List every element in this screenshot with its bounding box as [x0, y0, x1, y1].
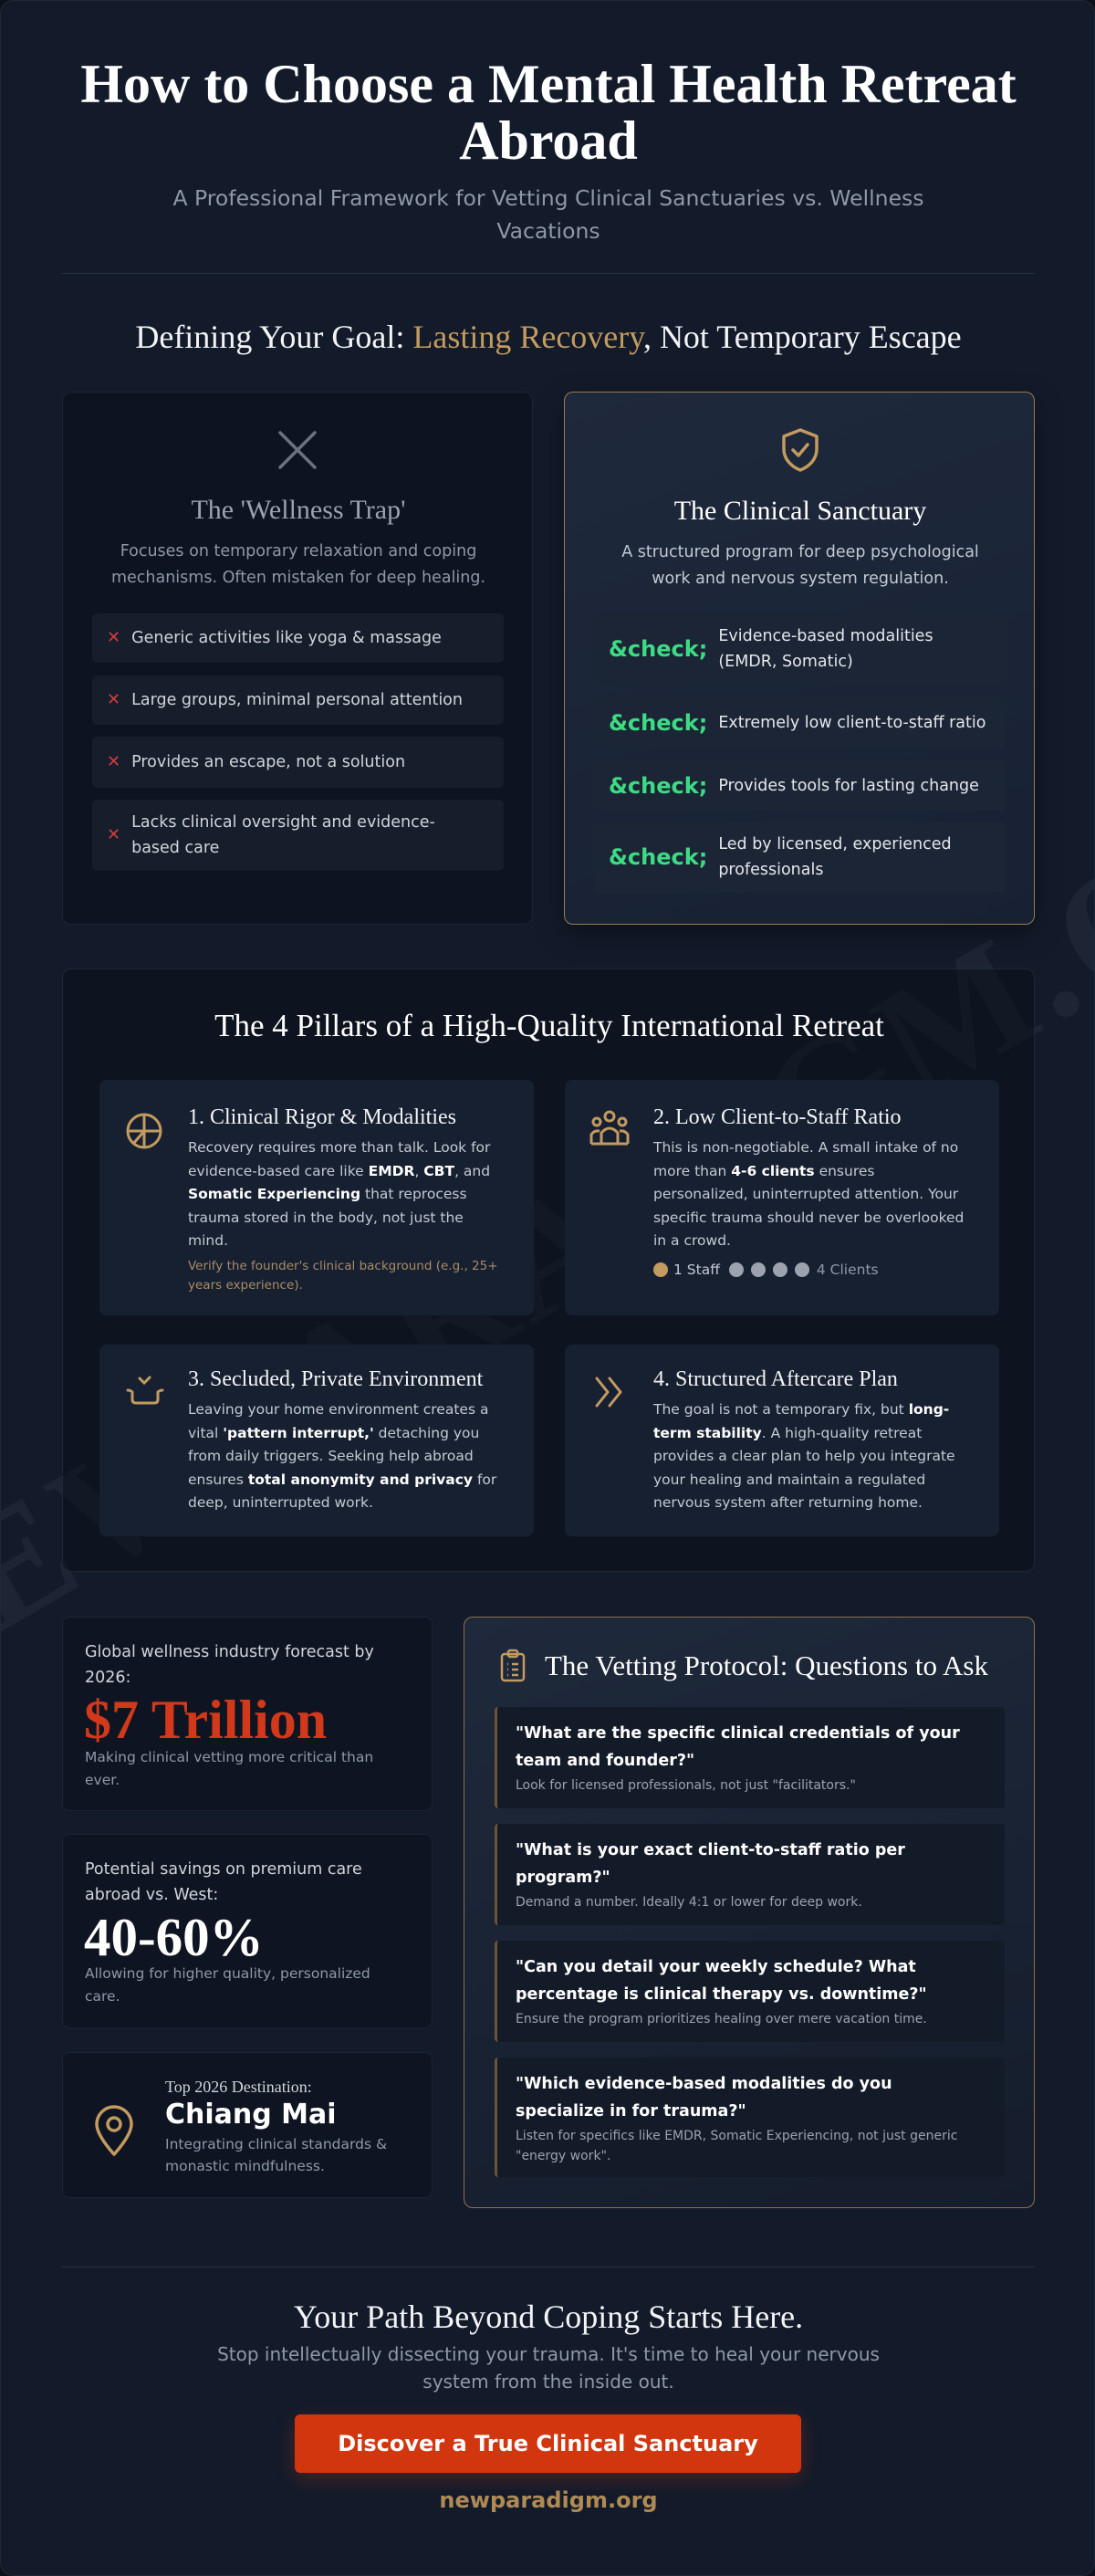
- panel: 4 pillars: [62, 969, 1035, 1572]
- pillar 1: 1. Clinical Rigor & Modalities: [188, 1105, 456, 1129]
- pillar 3: Leaving your home environment creates a vital 'pattern interrupt,' detaching you from daily triggers. Seeking help abroad ensures total anonymity and privacy for deep, uninterrupted work.: [188, 1401, 496, 1511]
- pillar 1: [99, 1080, 534, 1315]
- subtitle: A Professional Framework for Vetting Clinical Sanctuaries vs. Wellness Vacations: [172, 185, 924, 244]
- question 3: "Can you detail your weekly schedule? What percentage is clinical therapy vs. downtime?": [516, 1958, 927, 2004]
- list item: [594, 697, 1006, 748]
- question 4: specialize in for trauma?": [516, 2102, 746, 2120]
- ratio dots: 4 Clients: [817, 1262, 879, 1278]
- cta heading: Your Path Beyond Coping Starts Here.: [294, 2299, 803, 2335]
- question 4: [495, 2058, 1005, 2177]
- list item: [92, 800, 504, 871]
- title: How to Choose a Mental Health Retreat Abroad: [80, 54, 1017, 171]
- stat: chiang mai: Top 2026 Destination:: [165, 2078, 312, 2096]
- list item: ✕: [107, 825, 120, 844]
- list item: [594, 822, 1006, 893]
- list item: &check;: [609, 772, 707, 798]
- question 1: Look for licensed professionals, not just "facilitators.": [516, 1778, 856, 1793]
- stat: $7 trillion: Global wellness industry forecast by 2026:: [85, 1643, 374, 1687]
- pillar 3: [99, 1345, 534, 1536]
- pillar 4: The goal is not a temporary fix, but long-term stability. A high-quality retreat provides a clear plan to help you integrate your healing and maintain a regulated nervous system after returning home.: [653, 1401, 955, 1511]
- stat: $7 trillion: Making clinical vetting more critical than ever.: [85, 1749, 373, 1788]
- section heading: defining your goal: Defining Your Goal: Lasting Recovery, Not Temporary Escape: [135, 319, 962, 355]
- list item: Led by licensed, experienced professionals: [718, 835, 952, 879]
- list item: Extremely low client-to-staff ratio: [718, 714, 986, 732]
- list item: Lacks clinical oversight and evidence-: [131, 813, 435, 832]
- stat: chiang mai: Chiang Mai: [165, 2099, 337, 2131]
- question 3: Ensure the program prioritizes healing over mere vacation time.: [516, 2012, 927, 2026]
- question 1: "What are the specific clinical credentials of your team and founder?": [516, 1724, 960, 1770]
- stat: chiang mai: [62, 2052, 433, 2198]
- stat: 40-60%: Potential savings on premium care abroad vs. West:: [85, 1860, 362, 1904]
- note: Verify the founder's clinical background (e.g., 25+ years experience).: [188, 1259, 498, 1293]
- list item: &check;: [609, 710, 707, 736]
- stat: 40-60%: [62, 1834, 433, 2028]
- stat: 40-60%: 40-60%: [84, 1907, 264, 1967]
- description: Focuses on temporary relaxation and coping mechanisms. Often mistaken for deep healing.: [111, 542, 485, 587]
- icon: chevrons: [595, 1377, 622, 1408]
- question 2: [495, 1824, 1005, 1925]
- cta button: Discover a True Clinical Sanctuary: [338, 2431, 758, 2456]
- panel: vetting protocol: [464, 1617, 1035, 2208]
- cta button: [295, 2414, 801, 2473]
- list item: &check;: [609, 844, 707, 870]
- list item: Evidence-based modalities (EMDR, Somatic): [718, 627, 933, 671]
- pillar 2: [565, 1080, 999, 1315]
- stat: $7 trillion: [62, 1617, 433, 1811]
- pillar 1: Recovery requires more than talk. Look for evidence-based care like EMDR, CBT, and Somatic Experiencing that reprocess trauma stored in the body, not just the mind.: [188, 1139, 490, 1249]
- list item: [594, 613, 1006, 685]
- pillar 4: [565, 1345, 999, 1536]
- list item: ✕: [107, 690, 120, 709]
- list item: [92, 613, 504, 663]
- description: A structured program for deep psychological work and nervous system regulation.: [621, 543, 979, 588]
- icon: shield: [782, 428, 819, 472]
- list item: &check;: [609, 636, 707, 662]
- list item: ✕: [107, 752, 120, 771]
- ratio dots: [653, 1262, 879, 1278]
- pillar 4: 4. Structured Aftercare Plan: [653, 1367, 898, 1391]
- icon: map pin: [95, 2105, 133, 2156]
- question 2: Demand a number. Ideally 4:1 or lower for deep work.: [516, 1895, 862, 1910]
- question 4: Listen for specifics like EMDR, Somatic Experiencing, not just generic "energy work".: [516, 2129, 957, 2163]
- footer url: newparadigm.org: [439, 2487, 658, 2513]
- question 3: [495, 1941, 1005, 2042]
- list item: Large groups, minimal personal attention: [131, 691, 463, 709]
- icon: clipboard: [500, 1649, 526, 1681]
- question 2: "What is your exact client-to-staff ratio per program?": [516, 1841, 905, 1887]
- icon: people: [589, 1110, 630, 1145]
- question 1: [495, 1707, 1005, 1808]
- icon: x: [278, 431, 317, 469]
- list item: Provides tools for lasting change: [718, 776, 979, 794]
- list item: ✕: [107, 628, 120, 647]
- list item: [594, 760, 1006, 811]
- list item: Provides an escape, not a solution: [131, 753, 405, 771]
- list item: based care: [131, 839, 219, 857]
- pillar 3: 3. Secluded, Private Environment: [188, 1367, 483, 1391]
- panel: wellness trap: [62, 392, 533, 925]
- pillar 2: This is non-negotiable. A small intake of no more than 4-6 clients ensures personalized, uninterrupted attention. Your specific trauma should never be overlooked in a crowd.: [653, 1139, 964, 1249]
- heading: vetting protocol: The Vetting Protocol: Questions to Ask: [545, 1649, 988, 1681]
- panel: clinical sanctuary: [564, 392, 1035, 925]
- ratio dots: 1 Staff: [673, 1262, 720, 1278]
- list item: [92, 737, 504, 788]
- stat: 40-60%: Allowing for higher quality, personalized care.: [85, 1965, 370, 2005]
- list item: [92, 675, 504, 725]
- question 4: "Which evidence-based modalities do you: [516, 2075, 892, 2093]
- list item: Generic activities like yoga & massage: [131, 629, 442, 647]
- heading: wellness trap: The 'Wellness Trap': [191, 495, 406, 525]
- stat: $7 trillion: $7 Trillion: [84, 1690, 327, 1750]
- heading: 4 pillars: The 4 Pillars of a High-Quality International Retreat: [214, 1008, 884, 1043]
- cta text: Stop intellectually dissecting your trauma. It's time to heal your nervous system from the inside out.: [217, 2343, 880, 2393]
- heading: clinical sanctuary: The Clinical Sanctuary: [674, 496, 926, 526]
- icon: bowl: [126, 1376, 164, 1404]
- icon: pie: [126, 1114, 162, 1148]
- pillar 2: 2. Low Client-to-Staff Ratio: [653, 1105, 902, 1129]
- stat: chiang mai: Integrating clinical standards & monastic mindfulness.: [165, 2136, 387, 2174]
